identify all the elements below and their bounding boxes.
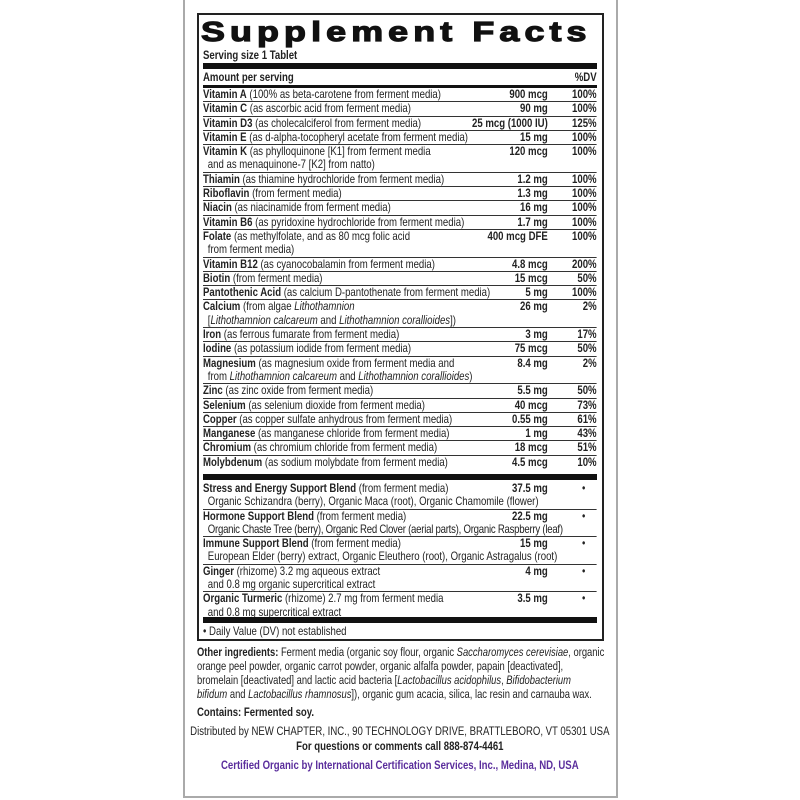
dv note: • Daily Value (DV) not established bbox=[203, 624, 347, 638]
amount header: %DV bbox=[575, 70, 597, 84]
vitamins table: 90 mg bbox=[520, 101, 548, 115]
blends table: Stress and Energy Support Blend (from ferment media) bbox=[203, 481, 448, 495]
blends table: European Elder (berry) extract, Organic Eleuthero (root), Organic Astragalus (root) bbox=[208, 549, 557, 563]
vitamins table: 61% bbox=[577, 412, 597, 426]
vitamins table: 8.4 mg bbox=[517, 356, 548, 370]
vitamins table: Molybdenum (as sodium molybdate from ferment media) bbox=[203, 455, 448, 469]
vitamins table: 50% bbox=[577, 271, 597, 285]
thick bar bottom bbox=[203, 617, 597, 623]
vitamins table: 100% bbox=[572, 229, 597, 243]
blends table: • bbox=[582, 536, 585, 550]
vitamins table: 100% bbox=[572, 101, 597, 115]
amount header: Amount per serving bbox=[203, 70, 294, 84]
thick bar middle bbox=[203, 474, 597, 480]
vitamins table: Iron (as ferrous fumarate from ferment media) bbox=[203, 327, 399, 341]
blends table: Immune Support Blend (from ferment media) bbox=[203, 536, 401, 550]
serving size: Serving size 1 Tablet bbox=[203, 48, 297, 62]
blends table: • bbox=[582, 591, 585, 605]
vitamins table: Iodine (as potassium iodide from ferment media) bbox=[203, 341, 411, 355]
vitamins table: Biotin (from ferment media) bbox=[203, 271, 322, 285]
vitamins table: 0.55 mg bbox=[512, 412, 548, 426]
blends table: 3.5 mg bbox=[517, 591, 548, 605]
vitamins table: Vitamin B6 (as pyridoxine hydrochloride from ferment media) bbox=[203, 215, 464, 229]
blends table: • bbox=[582, 564, 585, 578]
vitamins table: 100% bbox=[572, 144, 597, 158]
vitamins table: 100% bbox=[572, 215, 597, 229]
vitamins table: 51% bbox=[577, 440, 597, 454]
vitamins table: Calcium (from algae Lithothamnion bbox=[203, 299, 355, 313]
vitamins table: 10% bbox=[577, 455, 597, 469]
vitamins table: Vitamin E (as d-alpha-tocopheryl acetate from ferment media) bbox=[203, 130, 468, 144]
blends table: 4 mg bbox=[525, 564, 548, 578]
vitamins table: Manganese (as manganese chloride from ferment media) bbox=[203, 426, 450, 440]
vitamins table: 75 mcg bbox=[515, 341, 548, 355]
vitamins table: [Lithothamnion calcareum and Lithothamnion corallioides]) bbox=[208, 313, 456, 327]
other ingredients: orange peel powder, organic carrot powder, organic alfalfa powder, papain [deactivated], bbox=[197, 659, 563, 673]
blends table: • bbox=[582, 509, 585, 523]
vitamins table: and as menaquinone-7 [K2] from natto) bbox=[208, 157, 375, 171]
vitamins table: 17% bbox=[577, 327, 597, 341]
thick bar top bbox=[203, 63, 597, 69]
vitamins table: 100% bbox=[572, 87, 597, 101]
vitamins table: 15 mcg bbox=[515, 271, 548, 285]
vitamins table: Vitamin C (as ascorbic acid from ferment media) bbox=[203, 101, 411, 115]
other ingredients: bifidum and Lactobacillus rhamnosus]), organic gum acacia, silica, lac resin and carnauba wax. bbox=[197, 687, 592, 701]
vitamins table: 100% bbox=[572, 186, 597, 200]
vitamins table: from Lithothamnion calcareum and Lithothamnion corallioides) bbox=[208, 369, 472, 383]
vitamins table: 200% bbox=[572, 257, 597, 271]
distributor: Distributed by NEW CHAPTER, INC., 90 TECHNOLOGY DRIVE, BRATTLEBORO, VT 05301 USA bbox=[190, 724, 609, 738]
vitamins table: 125% bbox=[572, 116, 597, 130]
vitamins table: 4.5 mcg bbox=[512, 455, 548, 469]
vitamins table: Selenium (as selenium dioxide from ferment media) bbox=[203, 398, 425, 412]
vitamins table: 120 mcg bbox=[509, 144, 548, 158]
vitamins table: Zinc (as zinc oxide from ferment media) bbox=[203, 383, 373, 397]
vitamins table: 400 mcg DFE bbox=[488, 229, 548, 243]
vitamins table: Chromium (as chromium chloride from ferment media) bbox=[203, 440, 437, 454]
vitamins table: 1.7 mg bbox=[517, 215, 548, 229]
vitamins table: Folate (as methylfolate, and as 80 mcg folic acid bbox=[203, 229, 410, 243]
title: Supplement Facts bbox=[201, 16, 592, 47]
vitamins table: 2% bbox=[583, 299, 597, 313]
blends table: • bbox=[582, 481, 585, 495]
blends table: 15 mg bbox=[520, 536, 548, 550]
vitamins table: Vitamin D3 (as cholecalciferol from ferment media) bbox=[203, 116, 421, 130]
vitamins table: 5 mg bbox=[525, 285, 548, 299]
blends table: Organic Turmeric (rhizome) 2.7 mg from ferment media bbox=[203, 591, 443, 605]
vitamins table: Vitamin K (as phylloquinone [K1] from ferment media bbox=[203, 144, 431, 158]
blends table: Organic Chaste Tree (berry), Organic Red Clover (aerial parts), Organic Raspberry (leaf) bbox=[208, 522, 563, 536]
vitamins table: 2% bbox=[583, 356, 597, 370]
distributor bbox=[190, 724, 610, 752]
amount header bbox=[203, 70, 597, 88]
vitamins table: 50% bbox=[577, 383, 597, 397]
vitamins table: 100% bbox=[572, 130, 597, 144]
blends table: Hormone Support Blend (from ferment media) bbox=[203, 509, 406, 523]
vitamins table: 900 mcg bbox=[509, 87, 548, 101]
facts box bbox=[197, 13, 604, 641]
other ingredients: Other ingredients: Ferment media (organic soy flour, organic Saccharomyces cerevisiae, organic bbox=[197, 645, 604, 659]
vitamins table: 100% bbox=[572, 285, 597, 299]
vitamins table: 1.2 mg bbox=[517, 172, 548, 186]
vitamins table: 15 mg bbox=[520, 130, 548, 144]
vitamins table: Vitamin B12 (as cyanocobalamin from ferment media) bbox=[203, 257, 435, 271]
vitamins table: 100% bbox=[572, 200, 597, 214]
vitamins table: Pantothenic Acid (as calcium D-pantothenate from ferment media) bbox=[203, 285, 490, 299]
vitamins table: 5.5 mg bbox=[517, 383, 548, 397]
vitamins table: 1.3 mg bbox=[517, 186, 548, 200]
blends table: 37.5 mg bbox=[512, 481, 548, 495]
blends table: and 0.8 mg organic supercritical extract bbox=[208, 577, 375, 591]
vitamins table: 18 mcg bbox=[515, 440, 548, 454]
vitamins table: 50% bbox=[577, 341, 597, 355]
vitamins table: Copper (as copper sulfate anhydrous from ferment media) bbox=[203, 412, 452, 426]
vitamins table: Niacin (as niacinamide from ferment media) bbox=[203, 200, 391, 214]
outer panel bbox=[183, 0, 618, 798]
vitamins table: 40 mcg bbox=[515, 398, 548, 412]
blends table bbox=[203, 481, 597, 619]
blends table: and 0.8 mg supercritical extract bbox=[208, 605, 341, 619]
vitamins table: Thiamin (as thiamine hydrochloride from ferment media) bbox=[203, 172, 444, 186]
vitamins table: 100% bbox=[572, 172, 597, 186]
vitamins table: 3 mg bbox=[525, 327, 548, 341]
vitamins table: 25 mcg (1000 IU) bbox=[472, 116, 548, 130]
vitamins table: 16 mg bbox=[520, 200, 548, 214]
vitamins table: Vitamin A (100% as beta-carotene from ferment media) bbox=[203, 87, 441, 101]
blends table: Organic Schizandra (berry), Organic Maca (root), Organic Chamomile (flower) bbox=[208, 494, 539, 508]
contains: Contains: Fermented soy. bbox=[197, 705, 314, 719]
vitamins table: from ferment media) bbox=[208, 242, 294, 256]
vitamins table: 73% bbox=[577, 398, 597, 412]
distributor: For questions or comments call 888-874-4461 bbox=[296, 738, 503, 752]
vitamins table: 4.8 mcg bbox=[512, 257, 548, 271]
vitamins table: Riboflavin (from ferment media) bbox=[203, 186, 342, 200]
vitamins table bbox=[203, 87, 597, 469]
blends table: Ginger (rhizome) 3.2 mg aqueous extract bbox=[203, 564, 380, 578]
vitamins table: Magnesium (as magnesium oxide from ferment media and bbox=[203, 356, 454, 370]
vitamins table: 43% bbox=[577, 426, 597, 440]
vitamins table: 26 mg bbox=[520, 299, 548, 313]
blends table: 22.5 mg bbox=[512, 509, 548, 523]
other ingredients bbox=[197, 645, 604, 701]
vitamins table: 1 mg bbox=[525, 426, 548, 440]
other ingredients: bromelain [deactivated] and lactic acid bacteria [Lactobacillus acidophilus, Bifidobacterium bbox=[197, 673, 571, 687]
certification: Certified Organic by International Certification Services, Inc., Medina, ND, USA bbox=[221, 758, 579, 772]
